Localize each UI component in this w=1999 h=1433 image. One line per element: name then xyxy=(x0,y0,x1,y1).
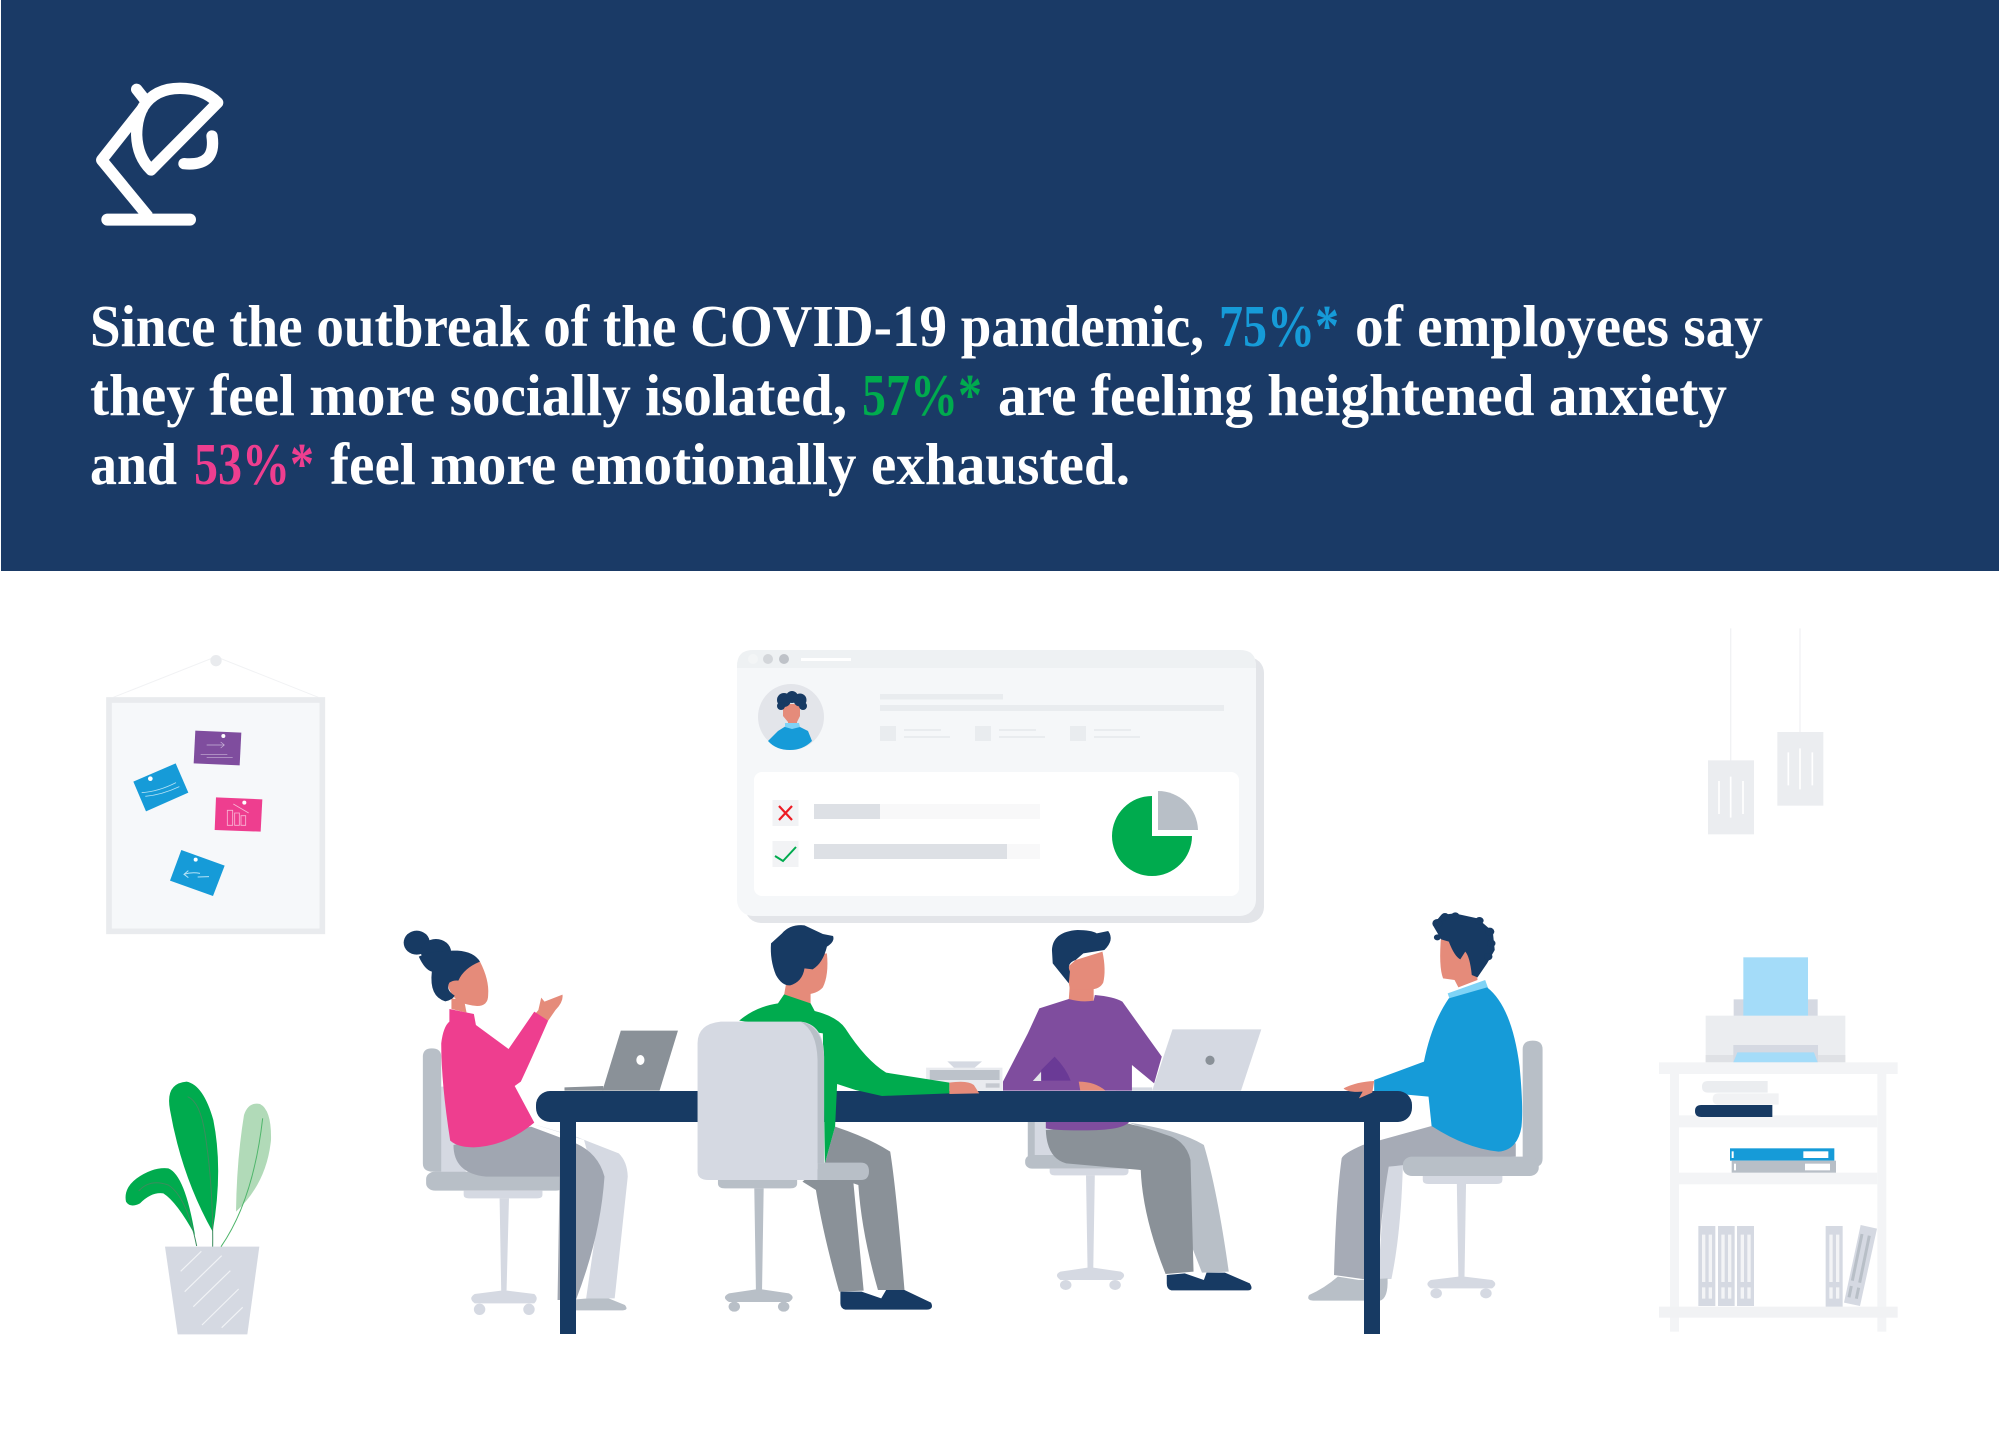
printer xyxy=(1706,957,1845,1062)
chair: purple man xyxy=(1025,1122,1140,1290)
headline text: are feeling heightened anxiety xyxy=(998,362,1727,428)
chair: blue man xyxy=(1423,1041,1543,1298)
books: stack top shelf xyxy=(1695,1081,1779,1117)
man in blue with chair xyxy=(1308,912,1543,1301)
binders xyxy=(1698,1225,1877,1307)
results panel xyxy=(754,772,1239,896)
meeting table xyxy=(536,1091,1412,1334)
headline text: feel more emotionally exhausted. xyxy=(330,431,1130,497)
icon: cross box xyxy=(772,800,798,826)
hair: green man xyxy=(771,925,833,985)
headline text: of employees say xyxy=(1355,293,1763,359)
chair: green man xyxy=(698,1022,869,1312)
chair: woman xyxy=(423,1048,565,1315)
laptop: light xyxy=(1116,1029,1261,1091)
note: pink xyxy=(215,797,262,832)
plant leaves xyxy=(126,1082,271,1247)
bulletin board xyxy=(109,655,322,931)
note: blue xyxy=(133,763,188,811)
hair: purple man xyxy=(1052,930,1111,983)
hanging lamps xyxy=(1708,628,1823,834)
icon: check box xyxy=(772,841,798,867)
note: purple xyxy=(194,731,241,765)
hand of man in blue xyxy=(1344,1081,1374,1098)
bar: high xyxy=(814,844,1040,859)
woman in pink with chair xyxy=(404,931,1002,1315)
icon: desk lamp logo xyxy=(102,88,218,220)
bar: low xyxy=(814,804,1040,819)
pie chart xyxy=(1112,791,1198,876)
headline text xyxy=(90,293,1763,497)
note: blue arrow xyxy=(170,850,225,896)
headline text: 75%* xyxy=(1219,293,1339,359)
header panel xyxy=(1,0,1999,571)
man in purple with chair and laptop xyxy=(1003,930,1261,1290)
dashboard window xyxy=(737,650,1264,923)
headline text: 53%* xyxy=(194,431,314,497)
books: middle shelf xyxy=(1730,1148,1836,1173)
hair: woman xyxy=(404,931,480,1001)
avatar xyxy=(758,684,824,750)
plant xyxy=(126,1082,271,1334)
hair: blue man xyxy=(1432,912,1495,977)
headline text: they feel more socially isolated, xyxy=(90,362,847,428)
man in green seen from behind xyxy=(698,925,979,1312)
shelf with printer xyxy=(1659,957,1898,1332)
headline text: and xyxy=(90,431,177,497)
desk device xyxy=(926,1061,1002,1091)
headline text: Since the outbreak of the COVID-19 pandemic, xyxy=(90,293,1204,359)
plant pot xyxy=(165,1247,259,1334)
laptop: grey xyxy=(564,1031,678,1091)
headline text: 57%* xyxy=(862,362,982,428)
